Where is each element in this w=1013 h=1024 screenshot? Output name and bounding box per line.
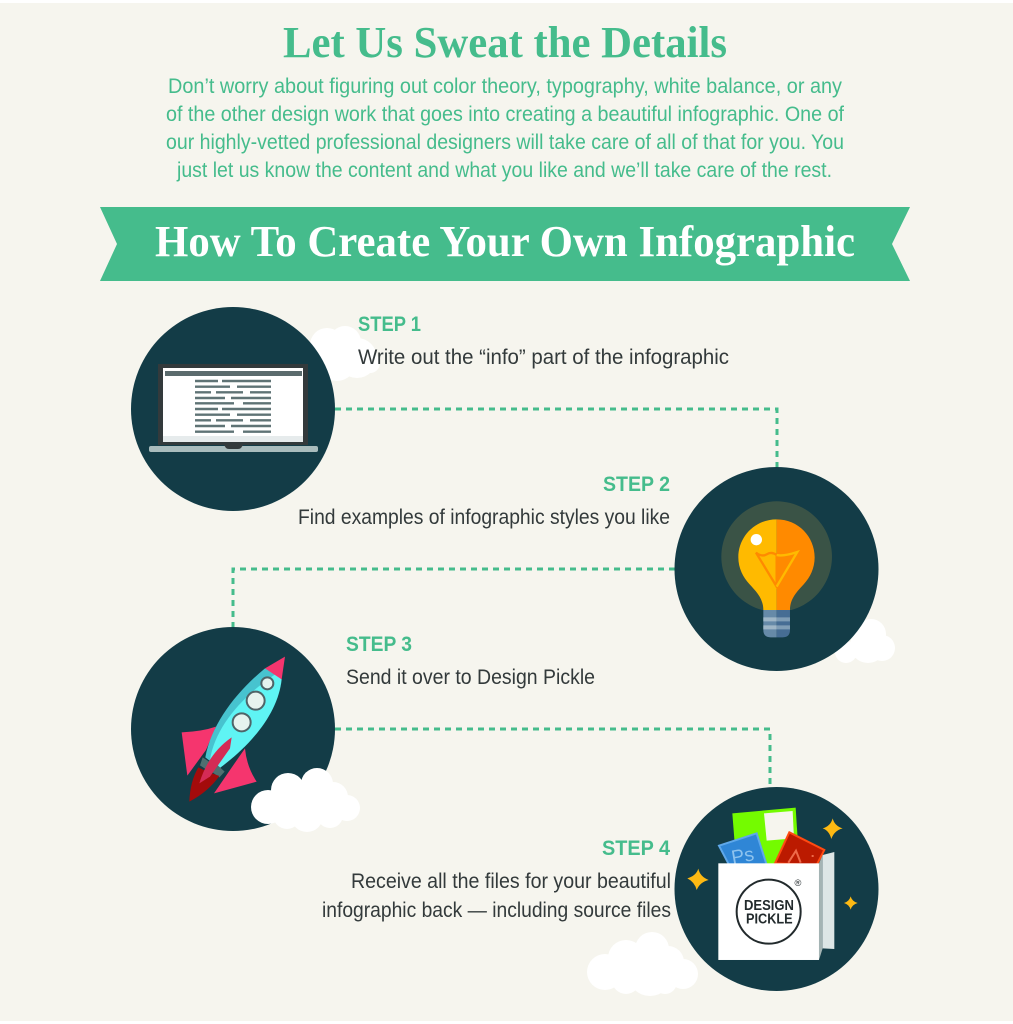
step 1 text: STEP 1 <box>358 313 421 336</box>
connector: step 1 to step 2 <box>335 409 777 467</box>
step 4 icon: design pickle bag: ® <box>795 878 802 888</box>
step 4 text <box>322 837 671 922</box>
step 4 icon: design pickle bag <box>674 787 878 991</box>
step 3 text: STEP 3 <box>346 633 412 656</box>
intro paragraph: our highly-vetted professional designers will take care of all of that for you. You <box>166 131 844 154</box>
step 1 text <box>358 313 729 369</box>
cloud: step 3 <box>251 768 360 832</box>
intro paragraph <box>166 75 844 182</box>
step 4 icon: design pickle bag: PICKLE <box>746 911 793 927</box>
step 2 icon: light bulb <box>674 467 878 671</box>
step 1 text: Write out the “info” part of the infographic <box>358 346 729 369</box>
step 2 text: STEP 2 <box>603 473 670 496</box>
step 3 icon: rocket <box>131 627 335 831</box>
cloud: step 4 <box>587 932 698 996</box>
intro paragraph: of the other design work that goes into creating a beautiful infographic. One of <box>166 103 844 126</box>
intro paragraph: Don’t worry about figuring out color theory, typography, white balance, or any <box>168 75 842 98</box>
cloud: step 2 <box>835 619 895 663</box>
connector: step 2 to step 3 <box>233 569 675 628</box>
cloud: step 1 <box>310 326 380 381</box>
connector: step 3 to step 4 <box>335 729 770 788</box>
step 4 text: STEP 4 <box>602 837 670 860</box>
step 2 text <box>298 473 670 529</box>
step 4 text: infographic back — including source files <box>322 899 671 922</box>
banner <box>100 207 910 281</box>
step 4 text: Receive all the files for your beautiful <box>351 870 671 893</box>
intro paragraph: just let us know the content and what you like and we’ll take care of the rest. <box>176 159 832 182</box>
step 3 text: Send it over to Design Pickle <box>346 666 595 689</box>
step 4 icon: design pickle bag: Ps <box>730 844 756 869</box>
title: Let Us Sweat the Details <box>283 18 727 67</box>
step 1 icon: laptop <box>131 307 335 511</box>
step 4 icon: design pickle bag: DESIGN <box>744 898 794 914</box>
step 2 text: Find examples of infographic styles you like <box>298 506 670 529</box>
step 3 text <box>346 633 595 689</box>
banner heading: How To Create Your Own Infographic <box>155 217 855 266</box>
